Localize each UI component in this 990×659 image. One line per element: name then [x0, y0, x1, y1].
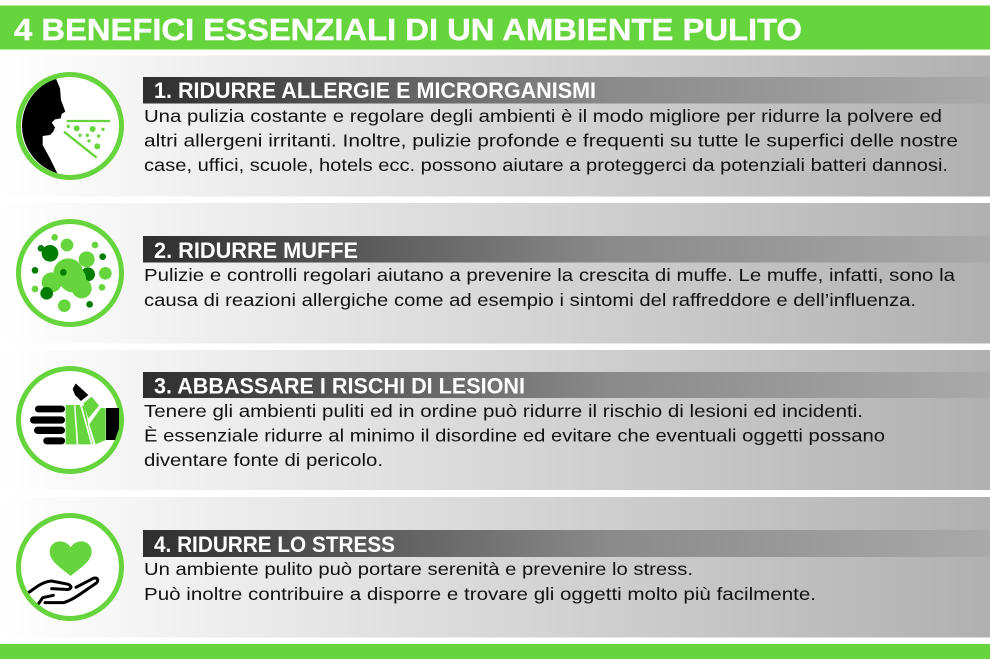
- heading 2: 2. RIDURRE MUFFE: [154, 238, 358, 263]
- text 3: Tenere gli ambienti puliti ed in ordine può ridurre il rischio di lesioni ed incidenti.: [144, 401, 863, 421]
- panel 1: allergie: [0, 56, 990, 196]
- heading 3: 3. ABBASSARE I RISCHI DI LESIONI: [154, 374, 525, 398]
- text 1: altri allergeni irritanti. Inoltre, pulizie profonde e frequenti su tutte le superfici delle nostre: [144, 130, 958, 150]
- icon 1: face coughing: [18, 74, 122, 178]
- heading 4: [143, 530, 990, 557]
- text 2: Pulizie e controlli regolari aiutano a prevenire la crescita di muffe. Le muffe, infatti, sono la: [144, 265, 955, 285]
- heading 2: [143, 236, 990, 263]
- text 3: diventare fonte di pericolo.: [144, 450, 383, 470]
- text 2: [144, 265, 955, 310]
- heading 3: [143, 372, 990, 398]
- text 1: Una pulizia costante e regolare degli ambienti è il modo migliore per ridurre la polvere ed: [144, 106, 942, 126]
- header bar: [0, 6, 990, 50]
- text 4: [144, 559, 816, 604]
- footer bar: [0, 644, 990, 659]
- icon 4: heart in hand: [18, 516, 122, 618]
- heading 1: [143, 77, 990, 104]
- text 4: Può inoltre contribuire a disporre e trovare gli oggetti molto più facilmente.: [144, 584, 816, 604]
- text 1: [144, 106, 958, 175]
- panel 4: stress: [0, 497, 990, 638]
- text 3: È essenziale ridurre al minimo il disordine ed evitare che eventuali oggetti possano: [144, 426, 885, 446]
- text 1: case, uffici, scuole, hotels ecc. possono aiutare a proteggerci da potenziali batteri dannosi.: [144, 155, 948, 175]
- text 4: Un ambiente pulito può portare serenità e prevenire lo stress.: [144, 559, 693, 579]
- icon 2: mould: [18, 222, 122, 324]
- panel 2: muffe: [0, 203, 990, 344]
- text 2: causa di reazioni allergiche come ad esempio i sintomi del raffreddore e dell’influenza.: [144, 290, 916, 310]
- text 3: [144, 401, 885, 470]
- heading 1: 1. RIDURRE ALLERGIE E MICRORGANISMI: [154, 78, 596, 103]
- heading 4: 4. RIDURRE LO STRESS: [154, 532, 395, 557]
- title: 4 BENEFICI ESSENZIALI DI UN AMBIENTE PULITO: [14, 12, 802, 47]
- icon 3: injured hand: [18, 368, 122, 472]
- panel 3: lesioni: [0, 350, 990, 490]
